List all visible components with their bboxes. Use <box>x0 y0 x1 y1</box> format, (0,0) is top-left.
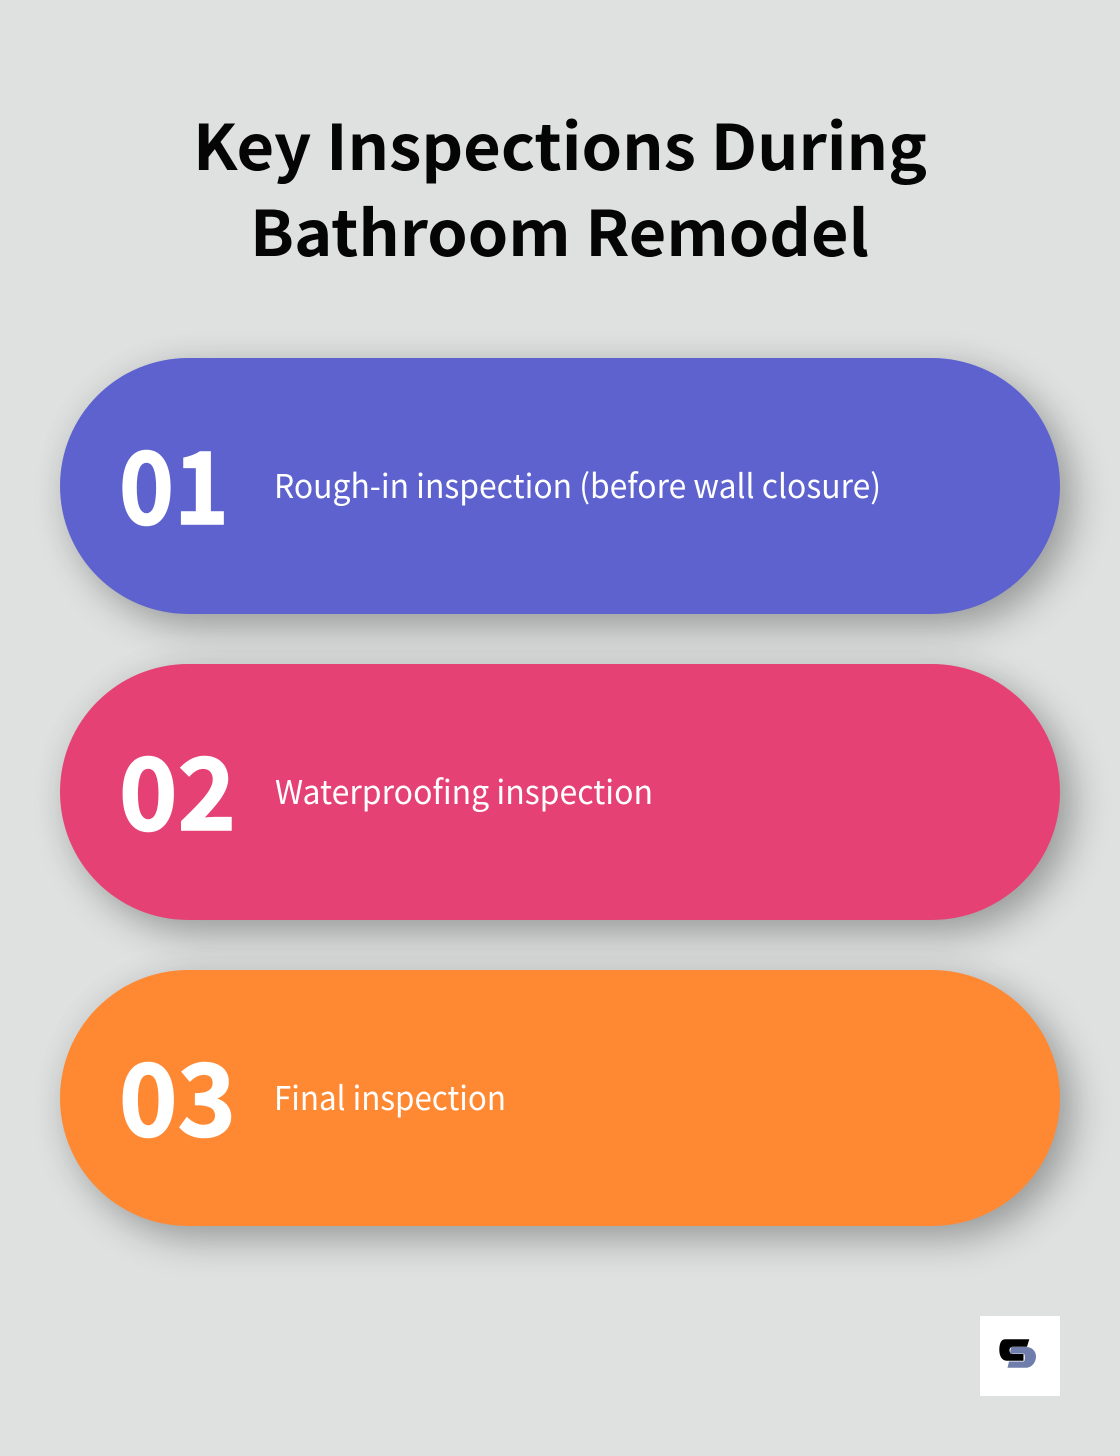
title: Bathroom Remodel <box>250 184 869 275</box>
text: final inspection: Final inspection <box>274 1072 506 1120</box>
panel: step 01 <box>60 358 1060 614</box>
icon: logo mark <box>999 1339 1036 1368</box>
title <box>193 98 927 275</box>
logo badge <box>980 1316 1060 1396</box>
number 03: 03 <box>119 1020 236 1165</box>
panel: step 02 <box>60 664 1060 920</box>
text: waterproofing inspection: Waterproofing inspection <box>275 766 653 814</box>
text: rough-in inspection: Rough-in inspection (before wall closure) <box>274 460 881 508</box>
number 02: 02 <box>119 714 236 859</box>
number 01: 01 <box>119 408 229 553</box>
panel: step 03 <box>60 970 1060 1226</box>
title: Key Inspections During <box>193 98 927 189</box>
